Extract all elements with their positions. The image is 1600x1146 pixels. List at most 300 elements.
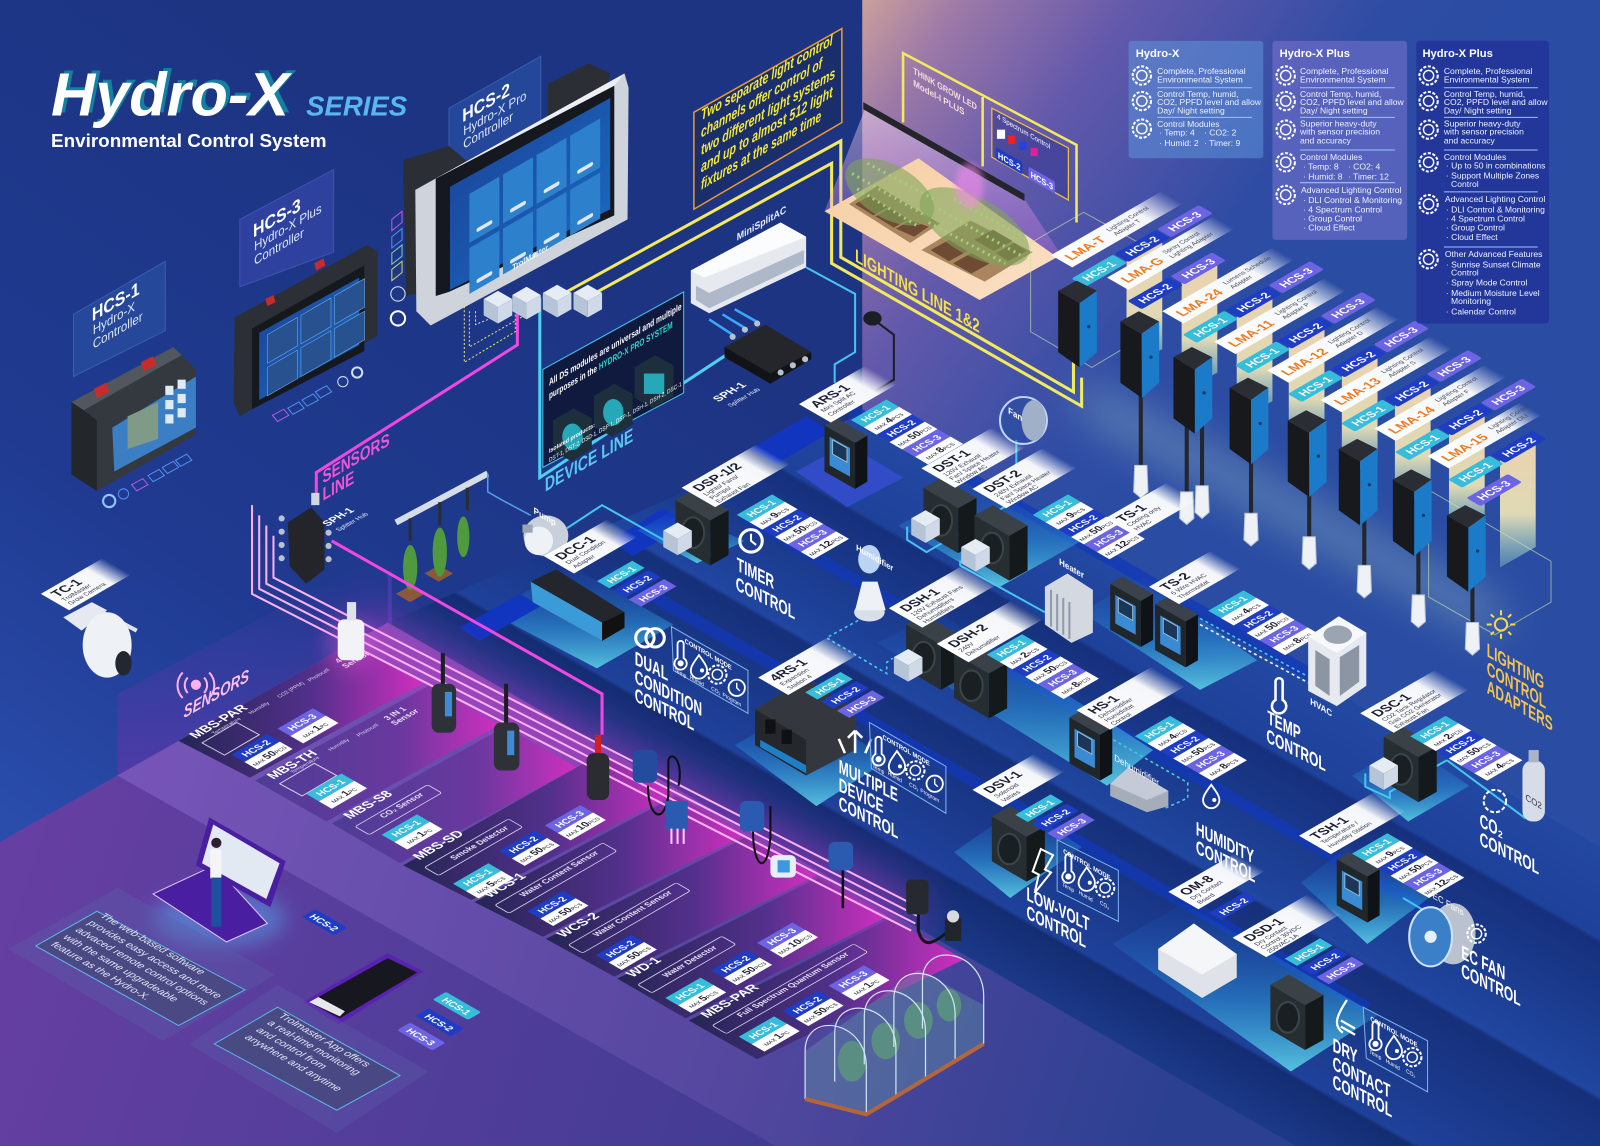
label: CO2 control xyxy=(1480,790,1539,879)
row: MBS-PAR quantum sensor xyxy=(697,944,890,1052)
hub: SPH-1 device splitter xyxy=(709,309,811,408)
solid cyan appliance links xyxy=(907,440,1526,920)
row 3 module: DSD-1 xyxy=(1233,894,1364,1050)
lighting rig xyxy=(824,53,1077,300)
row 2 module: DSP-1/2: Exhaust Fan xyxy=(714,482,753,504)
adapter row: LMA-12 xyxy=(1267,307,1429,569)
stock chips: TS: HCS-2 xyxy=(1242,610,1276,630)
title xyxy=(51,57,408,151)
label: dual condition control: DUAL xyxy=(635,647,668,686)
row: MBS-PAR 4 in 1: HCS-2 xyxy=(240,739,274,759)
stock chips: DSP-1/2: MAX 9PCS xyxy=(756,506,793,527)
label: dry contact control: CONTACT xyxy=(1333,1052,1390,1103)
adapter row: LMA-13: HCS-1 xyxy=(1349,405,1389,428)
row 3 device: 4RS-1: Expansion xyxy=(779,668,812,687)
adapter row: LMA-T: Lighting Control xyxy=(1105,206,1152,233)
feature panel: Hydro-X Plus: Superior heavy-duty xyxy=(1300,119,1377,129)
chip: HCS-2 web xyxy=(302,909,347,935)
feature panel: Hydro-X Plus: Hydro-X Plus xyxy=(1280,48,1350,60)
panel: control mode 1 xyxy=(671,627,748,713)
device: dehumidifier: Dehumidifier xyxy=(1114,752,1159,788)
row: MBS-SD: MBS-SD xyxy=(409,828,468,862)
adapter row: LMA-15: HCS-3 xyxy=(1475,479,1514,502)
panel: control mode 3: Humid xyxy=(1079,890,1093,904)
panel: 4 spectrum control: HCS-3 xyxy=(1031,169,1053,192)
stock chips: DSH: MAX 8PCS xyxy=(1057,675,1094,696)
label: timer control xyxy=(736,530,795,624)
magenta probe line xyxy=(332,541,602,735)
feature panel: Hydro-X Plus: · Timer: 12 xyxy=(1348,172,1389,182)
feature panel: Hydro-X: Control Modules xyxy=(1157,119,1220,129)
row: MBS-SD: MAX 10PCS xyxy=(562,815,603,839)
feature panel: Hydro-X: · Temp: 4 xyxy=(1159,128,1195,138)
feature panel: Hydro-X Plus extended: Superior heavy-duty xyxy=(1444,119,1521,129)
label: humidity control: CONTROL xyxy=(1196,836,1255,887)
label: multiple device control: DEVICE xyxy=(839,773,884,818)
row 3 adapter: DCC-1: HCS-3 xyxy=(637,583,672,604)
feature panel: Hydro-X Plus extended: Control Temp, humid, xyxy=(1444,89,1525,99)
row 2 controller: HS-1: Dehumidifier xyxy=(1097,697,1136,719)
label: timer control: CONTROL xyxy=(736,572,795,624)
row 3 module: DSV-1: Solenoid xyxy=(993,782,1022,799)
recessed sensor wall xyxy=(117,551,388,776)
row: MBS-PAR 4 in 1: MAX 50PCS xyxy=(249,744,290,768)
panel: web software text: with the same upgradeable xyxy=(59,933,181,1004)
card: HCS-3: HCS-3 xyxy=(253,193,301,242)
label: sensors line xyxy=(322,428,390,505)
row: WD-1 xyxy=(622,922,818,1013)
device: HCS-3 controller xyxy=(234,245,378,416)
row: MBS-PAR quantum sensor: MBS-PAR xyxy=(697,982,763,1020)
adapter row: LMA-13: HCS-3 xyxy=(1435,355,1475,378)
row: MBS-TH 3 in 1: Temperature xyxy=(289,756,322,775)
adapter row: LMA-G: Spray Control xyxy=(1161,231,1203,255)
card: HCS-2: HCS-2 xyxy=(462,78,510,126)
device: mini split AC xyxy=(691,204,806,313)
feature panel: Hydro-X Plus: Complete, Professional xyxy=(1300,66,1389,76)
adapter row: LMA-24: HCS-2 xyxy=(1235,291,1274,314)
feature panel: Hydro-X Plus: · Temp: 8 xyxy=(1303,161,1339,171)
greenhouse arches xyxy=(805,955,984,1114)
feature panel: Hydro-X Plus extended: · 4 Spectrum Control xyxy=(1446,213,1525,223)
adapter row: LMA-11: Lighting Control xyxy=(1274,289,1320,316)
feature panel: Hydro-X Plus extended: Control xyxy=(1451,179,1479,189)
feature panel: Hydro-X Plus extended xyxy=(1416,41,1549,324)
row: MBS-TH 3 in 1: Sensor xyxy=(388,707,422,727)
port icons: HCS-2 xyxy=(391,211,405,326)
stock chips: DSP-1/2: MAX 12PCS xyxy=(805,534,846,558)
feature panel: Hydro-X Plus extended: · Up to 50 in combinations xyxy=(1446,161,1545,171)
panel: DS modules: All DS modules are universal and multiple xyxy=(549,301,682,389)
feature panel: Hydro-X Plus extended: with sensor precision xyxy=(1443,127,1524,137)
row 3 module: DSD-1: Control 30VDC xyxy=(1259,925,1304,951)
row 1 modules: DST-2: Window AC xyxy=(1005,484,1041,505)
label: multiple device control: CONTROL xyxy=(839,792,898,844)
label: dry contact control: CONTROL xyxy=(1333,1070,1392,1122)
label: device line: DEVICE LINE xyxy=(545,424,633,497)
adapter row: LMA-11: HCS-3 xyxy=(1329,297,1369,320)
feature panel: Hydro-X Plus: · Cloud Effect xyxy=(1303,223,1355,233)
row 3 module: DSV-1: HCS-2 xyxy=(1039,808,1074,828)
port icons: HCS-3 xyxy=(272,367,362,421)
adapter row: LMA-11: Adapter P xyxy=(1281,302,1313,320)
adapter row: LMA-24: Adapter xyxy=(1229,274,1255,290)
row 1 controller: ARS-1: Controller xyxy=(826,399,858,417)
row: MBS-PAR 4 in 1: Photocell xyxy=(307,668,332,683)
label: temp control xyxy=(1266,678,1326,776)
row: MBS-PAR 4 in 1: MBS-PAR xyxy=(186,702,252,740)
label: EC fan control xyxy=(1461,925,1521,1011)
row 2 controller: HS-1: Control xyxy=(1109,712,1134,727)
adapter row: LMA-T: HCS-1 xyxy=(1080,260,1120,283)
row 1 controller: TS-1: Cooling only xyxy=(1126,505,1164,528)
row: MBS-SD xyxy=(409,805,606,899)
feature panel: Hydro-X Plus extended: · Medium Moisture Level xyxy=(1446,288,1540,298)
row: WD-1: MAX 50PCS xyxy=(728,960,770,984)
row: WCS-1 xyxy=(479,843,617,926)
row: MBS-PAR quantum sensor: MAX 50PCS xyxy=(800,1001,841,1024)
stock chips: ARS-1 xyxy=(851,400,963,464)
stock chips: TS: HCS-3 xyxy=(1267,624,1303,645)
feature panel: Hydro-X Plus: Day/ Night setting xyxy=(1300,105,1368,115)
label: humidity control xyxy=(1196,785,1255,887)
device: heater xyxy=(1045,556,1093,643)
adapter row: LMA-24: LMA-24 xyxy=(1172,287,1227,318)
chips: app HCS xyxy=(397,992,481,1051)
row: MBS-PAR quantum sensor: HCS-3 xyxy=(836,970,872,990)
stock chips: HS-1: MAX 50PCS xyxy=(1177,740,1219,764)
row: WCS-1: WCS-1 xyxy=(479,871,529,900)
stock chips: TS: MAX 8PCS xyxy=(1279,631,1315,652)
row 2 controller: TSH-1: TSH-1 xyxy=(1306,815,1352,841)
feature panel: Hydro-X Plus extended: Complete, Professional xyxy=(1444,66,1532,76)
callout: light channels: Two separate light control xyxy=(701,31,833,124)
row: MBS-PAR quantum sensor: Full Spectrum Quantum Sensor xyxy=(734,950,852,1018)
row: MBS-SD: MAX 5PCS xyxy=(473,874,509,895)
feature panel: Hydro-X: CO2, PPFD level and allow xyxy=(1157,97,1262,107)
row 2 module: DSH-1: Humidifiers xyxy=(922,604,957,625)
row: MBS-TH 3 in 1: 3 IN 1 xyxy=(381,705,409,721)
row 2 module: DSP-1/2: Pumps/ xyxy=(708,486,734,501)
panel: DS modules: purposes in the HYDRO-X PRO SYSTEM xyxy=(549,320,673,402)
label: dual condition control: CONDITION xyxy=(635,665,702,721)
stock chips: TSH-1: MAX 50PCS xyxy=(1395,858,1436,882)
dotted wiring under HCS-2 xyxy=(464,294,551,362)
row 2 controller: TSH-1 xyxy=(1299,792,1406,922)
panel: control mode 2 xyxy=(869,722,946,813)
row: WCS-1: Water Content Sensor xyxy=(517,849,602,898)
panel: app text: a real-time monitoring xyxy=(264,1019,364,1077)
purple sensor plateau xyxy=(117,622,1296,1146)
row 1 modules: DST-1: Window AC xyxy=(954,464,990,485)
label: lighting control adapters: LIGHTING xyxy=(1487,639,1544,694)
device: CO2 tank: CO2 xyxy=(1526,792,1542,811)
adapter row: LMA-13: LMA-13 xyxy=(1330,376,1385,407)
stock chips: TS xyxy=(1208,590,1320,655)
panel: control mode 4: Temp xyxy=(1369,1049,1381,1062)
row: MBS-TH 3 in 1: HCS-1 xyxy=(314,778,349,798)
adapter row: LMA-14: Adapter F xyxy=(1441,389,1472,407)
row: MBS-S8: MAX 1PC xyxy=(403,826,436,846)
row: WCS-1: HCS-2 xyxy=(535,895,570,915)
row: MBS-S8: MBS-S8 xyxy=(340,788,396,821)
stock chips: DSP-1/2: MAX 50PCS xyxy=(779,519,821,543)
device: heater: Heater xyxy=(1059,556,1084,581)
right wall gradient xyxy=(862,0,1600,869)
panel: control mode 4: Humid xyxy=(1386,1058,1400,1072)
stock chips: DST: MAX 50PCS xyxy=(1075,519,1117,543)
panel: control mode 4 xyxy=(1363,1007,1428,1092)
row 3 module: DSD-1: HCS-2 xyxy=(1308,952,1343,972)
row 1 modules: DST-1 xyxy=(911,428,1026,553)
label: dual condition control: CONTROL xyxy=(635,684,694,735)
title shadow: Hydro-X xyxy=(55,57,296,125)
label: EC fan control: EC FAN xyxy=(1461,941,1505,985)
row 2 module: DSP-1/2: Lights/ Fans/ xyxy=(702,474,741,497)
stock chips: HS-1: MAX 4PCS xyxy=(1154,727,1191,748)
adapter row: LMA-T: Adapter T xyxy=(1112,219,1143,237)
panel: control mode 4: CONTROL MODE xyxy=(1370,1015,1418,1050)
row 2 module: DSP-1/2: DSP-1/2 xyxy=(689,461,745,493)
stock chips: ARS-1: HCS-1 xyxy=(859,404,894,424)
stock chips: TSH-1: MAX 9PCS xyxy=(1371,844,1408,865)
laptop screen xyxy=(196,817,286,907)
feature panel: Hydro-X Plus extended: Control Modules xyxy=(1444,152,1506,162)
label: dual condition control xyxy=(635,629,702,735)
stock chips: HS-1: MAX 8PCS xyxy=(1205,757,1242,778)
row: MBS-PAR quantum sensor: MAX 1PC xyxy=(850,978,883,997)
stock chips: DSH: HCS-1 xyxy=(995,638,1030,659)
device: HCS-2 controller xyxy=(403,63,629,326)
stock chips: DSC-1: MAX 2PCS xyxy=(1430,727,1466,748)
device: HVAC: HVAC xyxy=(1310,696,1332,719)
row 1 controller: ARS-1: ARS-1 xyxy=(806,382,854,410)
row 1 controller: ARS-1: Mini Split AC xyxy=(819,391,858,413)
feature panel: Hydro-X Plus extended: Control xyxy=(1451,268,1479,278)
row: WD-1: WD-1 xyxy=(622,955,665,979)
yellow frame xyxy=(903,53,1077,222)
label: lamp model: Model-I PLUS xyxy=(913,78,964,117)
label: sensors line: SENSORS xyxy=(322,428,390,488)
feature panel: Hydro-X Plus extended: · Sunrise Sunset Climate xyxy=(1446,259,1541,269)
row 3 adapter: DCC-1: Dual Condition xyxy=(564,540,608,565)
panel: control mode 1: Program xyxy=(722,692,741,709)
row 1 controller: TS-2: 6 Wire HVAC xyxy=(1169,573,1209,596)
panel: control mode 3: Temp xyxy=(1062,882,1074,895)
label: humidity control: HUMIDITY xyxy=(1196,817,1254,868)
row 2 controller: HS-1: HS-1 xyxy=(1084,693,1123,716)
stock chips: TS: HCS-1 xyxy=(1216,595,1251,615)
sensor probe and wire xyxy=(863,311,894,396)
chips: app HCS: HCS-2 xyxy=(421,1013,456,1033)
feature panel: Hydro-X Plus extended: Hydro-X Plus xyxy=(1422,48,1493,60)
row: MBS-SD: Smoke Detector xyxy=(447,824,512,861)
adapter row: LMA-12: Adapter D xyxy=(1334,330,1366,349)
sensors line xyxy=(316,296,517,497)
lamp bars xyxy=(863,102,1024,208)
feature panel: Hydro-X Plus: · Humid: 8 xyxy=(1303,172,1343,182)
row: MBS-TH 3 in 1: MBS-TH xyxy=(263,748,321,781)
tiered floor bands xyxy=(388,413,1600,1146)
label: EC fan control: CONTROL xyxy=(1461,959,1521,1011)
row: MBS-TH 3 in 1: MAX 1PC xyxy=(327,786,360,805)
device: pump: Pump xyxy=(534,505,556,528)
connector cubes xyxy=(484,285,602,324)
row: WCS-2 xyxy=(553,883,690,970)
card: HCS-1 xyxy=(73,261,165,377)
panel: web software text: feature as the Hydro-X. xyxy=(47,940,154,1002)
panel: DS modules xyxy=(543,292,684,467)
row 1 controller: TS-2: Thermostat xyxy=(1176,580,1212,600)
row 2 module: DSH-1 xyxy=(889,565,997,690)
stock chips: HS-1: HCS-2 xyxy=(1168,735,1203,755)
adapter row: LMA-14: HCS-1 xyxy=(1403,434,1443,456)
panel: 4 spectrum control: 4 Spectrum Control xyxy=(997,112,1050,151)
label: lighting control adapters: ADAPTERS xyxy=(1487,676,1553,736)
panel: DS modules: DST-1, DST-2, DSD-1, DSP-1, DSP-1, DSH-1, DSH-2, DSC-1 xyxy=(549,380,682,464)
chips: app HCS: HCS-1 xyxy=(438,997,473,1017)
adapter row: LMA-12: HCS-1 xyxy=(1296,375,1336,398)
feature panel: Hydro-X: Control Temp, humid, xyxy=(1157,89,1238,99)
sensor: black probe 2 xyxy=(494,684,519,770)
row 3 adapter: DCC-1: HCS-2 xyxy=(621,574,655,595)
adapter row: LMA-11 xyxy=(1214,278,1376,546)
panel: control mode 2: Humid xyxy=(888,771,902,785)
adapter row: LMA-15: Lighting Control xyxy=(1487,404,1534,431)
feature panel: Hydro-X Plus extended: · Calendar Control xyxy=(1446,306,1516,316)
stock chips: DSC-1: HCS-2 xyxy=(1444,735,1478,755)
row: WD-1: HCS-3 xyxy=(765,927,800,947)
card: HCS-3 xyxy=(240,169,334,287)
stock chips: TSH-1 xyxy=(1352,833,1464,898)
panel: control mode 2: CONTROL MODE xyxy=(883,734,930,768)
hub: SPH-1 device splitter: Splitter Hub xyxy=(726,387,763,408)
hub: SPH-1 device splitter: SPH-1 xyxy=(711,381,750,404)
row 1 controller: TS-1: HVAC xyxy=(1133,519,1154,532)
row: MBS-S8: CO₂ Sensor xyxy=(377,791,427,819)
adapter row: LMA-14: Lighting Control xyxy=(1434,376,1480,403)
adapter row: LMA-G: LMA-G xyxy=(1117,255,1168,285)
feature panel: Hydro-X: Environmental System xyxy=(1157,74,1243,84)
panel: control mode 1: CONTROL MODE xyxy=(685,638,732,672)
device: fan marker xyxy=(1000,397,1047,444)
adapter row: LMA-15: Adapter DLI xyxy=(1494,413,1531,435)
row: MBS-PAR quantum sensor: HCS-2 xyxy=(791,995,825,1015)
feature panel: Hydro-X Plus extended: · Cloud Effect xyxy=(1446,232,1498,242)
feature panel: Hydro-X Plus extended: · Group Control xyxy=(1446,223,1505,233)
stock chips: DSC-1: HCS-3 xyxy=(1469,750,1505,770)
cyan line pump to DSP xyxy=(566,505,665,541)
row: MBS-PAR 4 in 1: Sensor xyxy=(339,650,373,669)
row: MBS-PAR 4 in 1: CO2 (PPM) xyxy=(276,681,307,699)
stock chips: ARS-1: MAX 4PCS xyxy=(870,411,907,432)
adapter row: LMA-24: HCS-1 xyxy=(1191,316,1231,339)
row: WD-1: HCS-2 xyxy=(719,955,754,975)
feature panel: Hydro-X Plus extended: · Spray Mode Control xyxy=(1446,278,1527,288)
panel: app text: Trolmaster App offers xyxy=(275,1012,373,1069)
sensor: black probe 1 xyxy=(432,653,456,733)
stock chips: DSH: HCS-3 xyxy=(1046,668,1081,688)
row 3 device: 4RS-1: HCS-3 xyxy=(845,695,880,715)
row 1 modules: DST-2 xyxy=(961,448,1077,581)
panel: control mode 2: CO₂ xyxy=(909,782,918,793)
adapter row: LMA-11: HCS-2 xyxy=(1287,322,1326,345)
stock chips: DSH: HCS-2 xyxy=(1020,654,1055,674)
adapter row: LMA-12: HCS-3 xyxy=(1382,326,1422,349)
device: HCS-2 controller: TrolMaster xyxy=(512,242,549,272)
label: low-volt control: LOW-VOLT xyxy=(1027,883,1089,936)
row: WCS-2: Water Content Sensor xyxy=(590,889,675,938)
row strips under chips xyxy=(612,410,1469,1008)
phone app xyxy=(303,953,423,1025)
tray group A xyxy=(849,186,940,243)
row: MBS-S8: HCS-1 xyxy=(390,819,425,839)
stock chips: DSP-1/2: HCS-3 xyxy=(796,528,831,549)
row 3 adapter: DCC-1: DCC-1 xyxy=(551,534,599,562)
stock chips: DSC-1: HCS-1 xyxy=(1418,720,1453,740)
device: dehumidifier xyxy=(1110,752,1168,812)
neon sensor bus xyxy=(252,505,922,931)
row 1 modules: DST-1: 120V Exhaust xyxy=(942,453,984,478)
adapter row: LMA-G: HCS-3 xyxy=(1179,258,1219,280)
hub: SPH-1 sensor splitter: Splitter Hub xyxy=(334,512,371,533)
panel: web software text: advaced remote control options xyxy=(72,926,212,1007)
row 3 adapter: DCC-1: Adapter xyxy=(571,554,598,569)
row 3 adapter: DCC-1: HCS-1 xyxy=(605,565,640,585)
stock chips: DST: HCS-3 xyxy=(1092,528,1127,549)
adapter row: LMA-12: Lighting Control xyxy=(1327,318,1373,345)
peach platform xyxy=(824,158,1057,300)
feature panel: Hydro-X Plus extended: · Support Multiple Zones xyxy=(1446,171,1539,181)
card: HCS-2 xyxy=(449,56,541,184)
stock chips: TS: MAX 50PCS xyxy=(1251,615,1292,639)
adapter row: LMA-11: LMA-11 xyxy=(1224,318,1278,349)
label: dry contact control: DRY xyxy=(1333,1034,1358,1068)
label: CO2 control: CO₂ xyxy=(1480,809,1503,843)
row: MBS-SD: MAX 50PCS xyxy=(516,840,557,864)
callout: light channels xyxy=(694,29,842,209)
stock chips: DSH: MAX 2PCS xyxy=(1006,645,1043,666)
adapter row: LMA-T: LMA-T xyxy=(1061,234,1110,262)
panel: control mode 4: CO₂ xyxy=(1406,1068,1415,1080)
row 1 controller: ARS-1 xyxy=(799,366,897,489)
adapter row: LMA-15 xyxy=(1428,401,1546,655)
row: WCS-2: WCS-2 xyxy=(553,910,603,939)
lighting lines xyxy=(559,141,1082,406)
row 2 module: DSH-2: 240V xyxy=(957,642,977,653)
hub: SPH-1 sensor splitter: SPH-1 xyxy=(320,506,357,528)
row 1 module: DSC-1: Exhaust Fan xyxy=(1393,707,1432,730)
row 3 device: 4RS-1: HCS-2 xyxy=(829,686,864,706)
stock chips: DSC-1 xyxy=(1410,716,1522,781)
label: multiple device control: MULTIPLE xyxy=(839,755,898,807)
stock chips: TSH-1: HCS-3 xyxy=(1411,867,1446,887)
label: CO2 control: CONTROL xyxy=(1480,828,1539,879)
feature panel: Hydro-X Plus extended: Day/ Night setting xyxy=(1444,105,1512,115)
adapter row: LMA-14: HCS-2 xyxy=(1447,409,1486,431)
feature panel: Hydro-X Plus: Environmental System xyxy=(1300,74,1386,84)
device line xyxy=(540,298,731,478)
row: WD-1: HCS-1 xyxy=(673,982,708,1002)
row 2 controller: TSH-1: Temperature / xyxy=(1319,821,1361,845)
subtitle: Environmental Control System xyxy=(51,130,327,151)
callout: light channels: and up to almost 512 light xyxy=(701,83,833,176)
dotted wiring to appliances xyxy=(827,618,1308,808)
callout: light channels: two different light systems xyxy=(701,65,835,159)
adapter row: LMA-G: HCS-2 xyxy=(1136,283,1176,305)
row: MBS-TH 3 in 1: Photocell xyxy=(356,723,381,738)
glow along lighting adapters xyxy=(1082,383,1500,638)
